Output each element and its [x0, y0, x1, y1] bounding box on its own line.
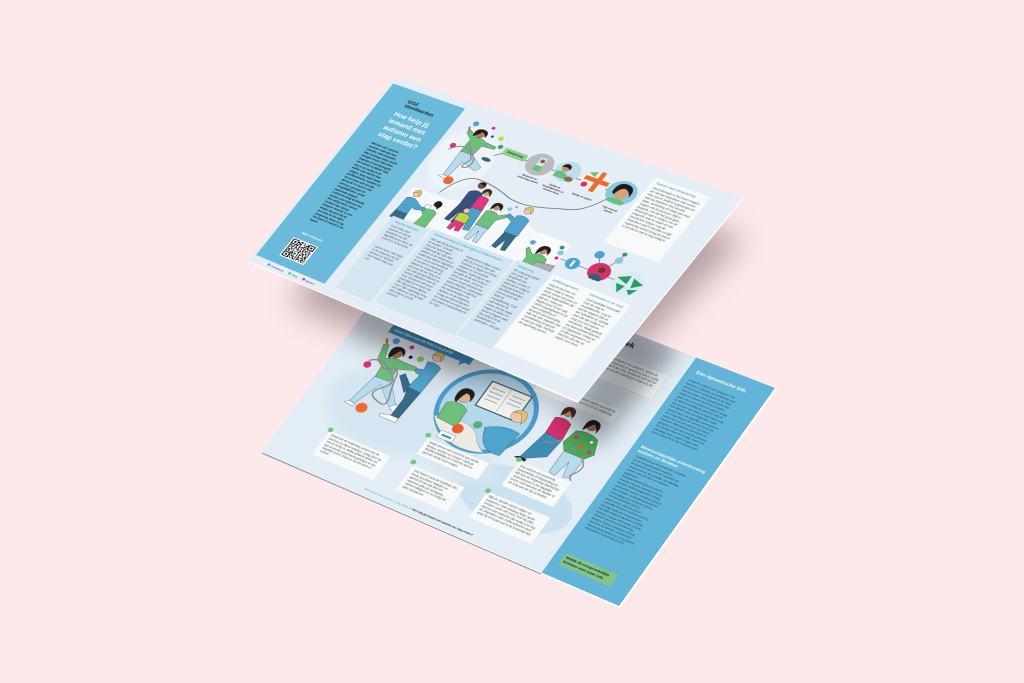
text box 4: [501, 461, 571, 507]
QR code: [280, 237, 318, 266]
panel 3: text: [457, 260, 552, 349]
reference list: Autisme Kennisnet, Amsterdam: [589, 519, 632, 540]
text box 3: Stel doelen vast die haalbaar zijn. Denk aan kleine stappen en spreek af wie wat doet en wanneer jullie de voortgang samen bekijken en zo nodig het plan aanpassen.: [402, 469, 459, 502]
small blue dots near man: [506, 204, 518, 213]
text box 1: Bespreek de hulpvraag samen met de persoon en diens naasten. Vraag door op wat er nodig is, welke prikkels spelen en wat al eerder goed heeft geholpen in het dagelijks leven, thuis en op het werk of school.: [319, 434, 382, 470]
woman in dotted green shirt: [528, 409, 614, 484]
dots around laptop woman: [525, 235, 568, 261]
panel 2: text: [375, 229, 514, 335]
green box: Bekijk de oorspronkelijke: [565, 556, 610, 578]
portrait circles on the path: [519, 148, 645, 209]
illustrations: bottom sheet: [328, 324, 601, 534]
body text: Autisme is geen vast gegeven. De klachten, krachten en behoeften van een persoon veranderen in de loop van het leven. Een dynamische blik helpt om steeds opnieuw te kijken naar wat er nu speelt en wat er nodig is. Betrek daarbij de persoon zelf en de mensen om hem of haar heen. Kijk niet alleen naar de diagnose, maar vooral naar het dagelijks functioneren, de omgeving en de wensen voor de toekomst van de persoon en diens naasten. Blijf samen met elkaar in gesprek en stel de zorg bij wanneer de situatie daarom vraagt, want wat vandaag helpt, hoeft morgen niet meer passend te zijn voor iemand.: [651, 378, 736, 451]
heading: Ondersteuning bij hulpvragen en hulpverleners: [433, 233, 504, 262]
table: [422, 411, 497, 457]
badge 4: [515, 456, 523, 463]
tall man: [444, 179, 490, 225]
caption 2: Bekijk de mogelijkheden en wensen thuis: [541, 183, 565, 195]
reference list: Kennisplein Gehandicaptensector: [612, 487, 659, 508]
heading: literatuur: modules en literatuur: [637, 449, 679, 469]
text box 2: Maak samen een overzicht van sterke kanten, wensen en zorgen. Gebruik daarbij duidelijke en concrete taal en geef de ruimte voor vragen.: [422, 441, 480, 470]
badge 2: [424, 432, 432, 438]
speech bubble: [386, 325, 475, 368]
reference list: Module Zelfmanagement (2018): [616, 480, 661, 501]
green box: bronnen voor meer info: [562, 560, 604, 580]
list: Samen leren. Wat helpt in de omgeving van de persoon en wat juist niet? Welke stap past nu?: [364, 245, 403, 266]
heading: Samen naar verandering: [655, 182, 697, 198]
bottom sheet: [262, 247, 775, 606]
footer legend: [267, 263, 315, 285]
green label text: Zorgvraag: [506, 150, 524, 159]
heading right: Informatie en de zorg: [589, 293, 624, 309]
man at the table: [472, 402, 533, 458]
badge 3: [409, 459, 417, 465]
text box: small note: Bekijk samen wat past bij: [580, 397, 616, 413]
title: stap verder?: [376, 131, 419, 151]
reference list: Werkboek Levensloop (2022): [584, 526, 625, 545]
woman in green: [463, 201, 515, 247]
reference list: Handreiking Wonen en Zorg (2021): [586, 523, 635, 545]
text box: top right: [566, 342, 667, 398]
caption 4: Kijk vooruit samen: [602, 205, 618, 214]
top sheet: [248, 76, 743, 401]
whiteboard: [475, 381, 532, 421]
reference list: [584, 455, 687, 545]
woman in pink shirt: [514, 400, 583, 469]
reference list: Akwa GGZ, Utrecht (2022): [605, 497, 642, 514]
balls and pad: [436, 411, 484, 449]
background blobs: [294, 349, 618, 548]
connector top: [493, 150, 611, 197]
paragraph: Geef uitleg over autisme en wat dit betekent voor het dagelijks leven thuis, op school en op het werk.: [381, 224, 413, 249]
panel 1: text: [336, 216, 429, 302]
man and person with document: [389, 187, 447, 229]
caption 1: Bespreek de zorgvraag samen: [517, 173, 539, 184]
panel: right blue column: [542, 357, 775, 606]
woman with rope and orange ball: [338, 338, 436, 424]
main illustration group: [385, 116, 649, 285]
paragraph: De omgeving speelt een grote rol. Bespreek met naasten, school of werk wat er nodig is. Zorg dat iedereen dezelfde afspraken kent en weet wat helpt bij overprikkeling. Geef ook naasten de ruimte om hun eigen vragen te stellen en steun te krijgen waar dat nodig is in de thuissituatie en daarbuiten, ook later.: [473, 269, 540, 331]
reference list: Generieke module Naasten (2020): [614, 484, 662, 505]
reference list: Module Herstelondersteuning: [593, 513, 634, 532]
reference list: Landelijk Netwerk Autisme (2021): [603, 500, 649, 521]
heading: hidden behind top sheet: Het gesprek: [590, 327, 637, 350]
heading: literatuur: Wetenschappelijke onderbouwing: [639, 445, 706, 474]
green box: [558, 553, 618, 586]
speech bubble text: Samen kijken naar wat helpt in de praktijk: [393, 328, 454, 355]
heading: Een dynamische blik: Een dynamische blik: [695, 370, 747, 393]
floating dots: [362, 333, 430, 384]
woman at laptop: [514, 241, 565, 276]
woman in pink: [455, 188, 499, 231]
reference list: Module Psycho-educatie (2019): [619, 477, 663, 497]
white backdrops: [387, 119, 626, 274]
title: Hoe help jij: [392, 111, 431, 129]
reference list: Module Vroege interventie (2020): [596, 510, 642, 531]
text box: top right: Een goede hulpvraag ontstaat in het gesprek. Neem de tijd om samen te kijken naar wat er speelt en wat er nodig is voor de volgende stap in de zorg. Bespreek ook wat de persoon zelf wil bereiken en wie daarbij kan helpen in de eigen omgeving.: [574, 346, 660, 388]
title: [376, 111, 431, 151]
heading left: Zelfmanagement: [552, 278, 579, 291]
reference list: Trimbos-instituut (2021): [607, 493, 641, 509]
text box 3: [396, 466, 464, 512]
column one: Sluit aan bij de persoon en de wensen. Gebruik concrete taal en geef voldoende tijd. Kijk naar prikkels in de omgeving en maak daar samen afspraken over. Let op vermoeidheid en herstel na inspanning. Betrek de naasten als de persoon dat wil. Zorg voor een vast aanspreekpunt en heldere afspraken over de zorg. Bespreek ook wat er goed gaat in het leven van alle dag en bouw daarop voort. Kijk regelmatig terug met elkaar en stel bij waar dat nodig is voor de persoon.: [386, 237, 464, 301]
text box 5: [469, 491, 550, 544]
logo text: standaarden: [403, 103, 435, 118]
large circle: conversation scene: [417, 358, 555, 466]
reference list: Module Samen beslissen (2019): [591, 516, 636, 537]
title: autisme een: [381, 124, 423, 143]
list text: Veranderingen in het leven vragen om nieuwe afspraken. Kijk samen naar wat er anders is geworden en wat dat betekent. Een nieuwe baan, verhuizing of relatie kan veel vragen van de persoon. Blijf in gesprek, ook als het goed gaat. Bespreek wat er nodig is om de volgende stap te zetten en wie daarbij kan helpen. Leg de afspraken vast in het plan en kijk regelmatig samen terug op wat er is bereikt en wat er nog nodig is.: [621, 186, 700, 243]
column two: Hulpverleners kijken samen met de persoon naar wat haalbaar is. Begin met kleine stappen en vier wat lukt. Evalueer regelmatig en stel het plan bij als dat nodig is. Denk aan werk, school en wonen. Houd rekening met andere klachten, zoals angst of somberheid, en kijk hoe die samenhangen met autisme en de omgeving. Vraag om advies wanneer het vastloopt en werk samen met andere hulpverleners in de regio.: [428, 255, 501, 314]
text box: small note: [533, 379, 621, 422]
panel: blue left column: [256, 84, 465, 284]
reference list: Vereniging voor Autisme (2022): [610, 490, 653, 510]
shadow of top sheet: [283, 216, 751, 454]
reference list: Zorgstandaard Autisme (2017): [621, 474, 664, 493]
woman with rope: [429, 124, 505, 187]
heading: Psycho-educatie: [394, 220, 420, 232]
text box 2: [416, 438, 489, 480]
orange ball: [441, 175, 455, 185]
winding path: [439, 149, 608, 243]
man in blue: [484, 202, 538, 252]
illustrations: top sheet: [389, 121, 644, 296]
panel: zelfmanagement white box: [494, 274, 631, 379]
column right: Geef duidelijke informatie over de zorg en mogelijkheden. Leg uit wat de stappen zijn en wie betrokken is. Verwijs door als dat nodig is en zorg voor een warme overdracht. Maak gebruik van betrouwbare bronnen en lotgenoten. Vraag na of alles begrepen is en bied het ook aan op papier voor thuis.: [555, 298, 621, 347]
intro text: Mensen met autisme ervaren vaak dat hun situatie snel verandert. Wat vandaag helpt, werkt morgen soms niet meer. Daarom is het belangrijk om samen te kijken naar wat er nu nodig is en welke stap daarna kan volgen. Deze kaart helpt professionals, naasten en de persoon zelf om het gesprek te voeren over wensen, grenzen en mogelijkheden, zodat passende zorg en ondersteuning dichterbij komen voor iedereen die dat nodig heeft. Samen zoeken naar kleine stappen vooruit, in een tempo dat past bij de persoon en de eigen omgeving, thuis en op het werk of school in de buurt.: [309, 141, 400, 230]
child: [446, 207, 475, 233]
reference list: Gebaseerd op de generieke modules en de zorgstandaard autisme, aangevuld met recente inzichten uit onderzoek en de praktijk van alledag, samen met cliënten en naasten opgesteld.: [623, 455, 687, 487]
chain lower: icons and connectors: [553, 235, 660, 299]
QR caption: Meer informatie: [301, 231, 324, 243]
reference list: Richtlijn Autisme kinderen (2019): [598, 506, 644, 527]
floating dots and plug: [448, 119, 514, 163]
text box 5: Blijf de situatie samen volgen en evalueren. Wat vandaag helpt, werkt morgen soms niet meer. Pas het plan daarom aan wanneer dat nodig is en leg de afspraken vast, zodat iedereen weet waar hij of zij aan toe is de komende tijd.: [476, 495, 536, 536]
text box: small note: de persoon en de omgeving.: [573, 398, 614, 416]
column left: Help de persoon om eigen regie te nemen. Maak samen een plan en gebruik hulpmiddelen die passen, zoals een dagstructuur of een app. Oefen vaardigheden in de eigen omgeving en bespreek wat goed ging. Kijk ook naar signalen van overbelasting en spreek af wat dan helpt. Herhaal dit regelmatig samen.: [518, 283, 578, 334]
legend: naasten: Cliënt: [290, 273, 298, 278]
credit line: Meer weten over autisme? Lees verder op Hoe help jij iemand met autisme een stap verder?: [364, 487, 474, 537]
caption 3: Bekijk de opties: [571, 192, 593, 202]
panel: top right white box: [604, 177, 711, 262]
text box 4: Kies samen een passende behandeling of begeleiding en kijk hoe de omgeving daarbij kan ondersteunen in het dagelijks leven, ook wanneer de situatie in de loop van de tijd verandert.: [508, 464, 560, 499]
text box 1: [312, 431, 391, 480]
reference list: Richtlijn Autisme volwassenen: [600, 503, 642, 523]
legend: professionals: Professional: [270, 265, 284, 272]
woman at the table: [435, 385, 481, 427]
green label: [501, 148, 529, 162]
man in blue shirt: [372, 345, 450, 425]
badge 5: [484, 488, 492, 494]
heading: Omgeving: [517, 264, 535, 273]
badge 1: [327, 427, 334, 433]
title: iemand met: [387, 117, 427, 136]
legend: naaste: Naasten: [305, 279, 315, 285]
